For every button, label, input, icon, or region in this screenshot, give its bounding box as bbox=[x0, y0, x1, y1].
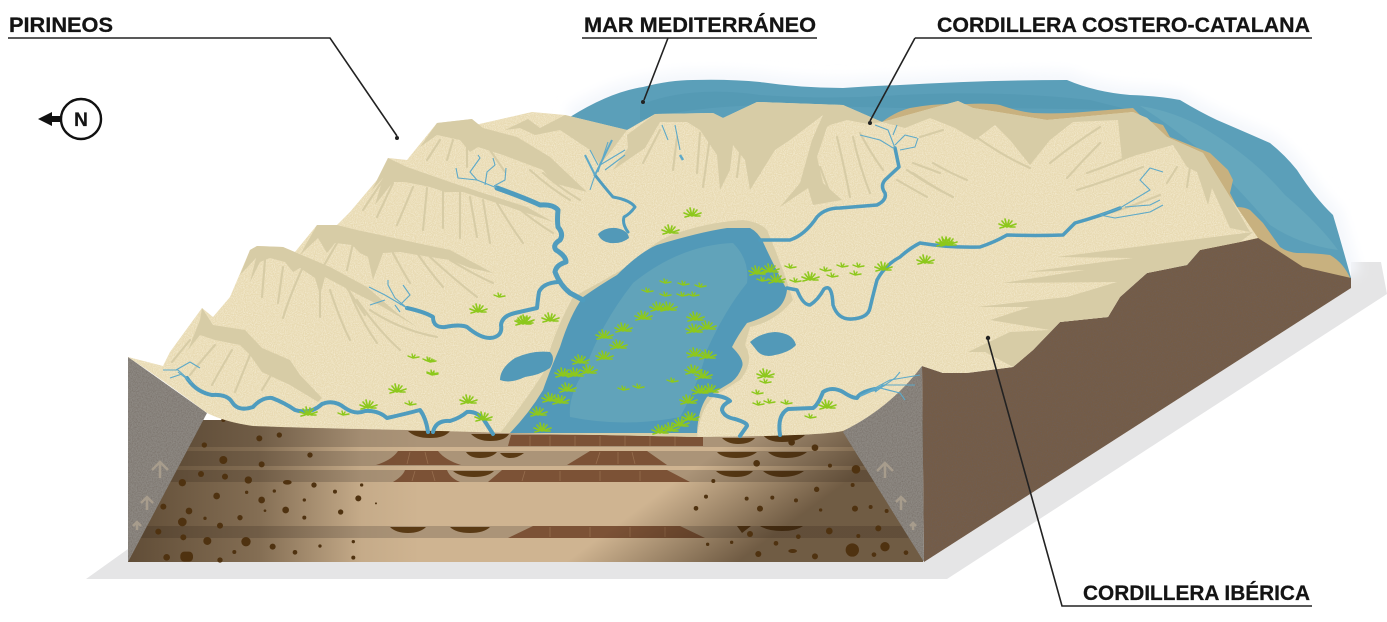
label: Cordillera Costero-Catalana bbox=[868, 14, 1312, 125]
mountain gullies bbox=[172, 120, 1190, 392]
side shading of the strata bbox=[128, 420, 923, 562]
marsh vegetation bbox=[300, 208, 1016, 434]
icon: north compass bbox=[38, 99, 101, 139]
left grey wall with faint uplift arrows bbox=[128, 357, 207, 562]
sandstone channels bbox=[376, 435, 705, 538]
label: Cordillera Ibérica bbox=[986, 336, 1312, 606]
label: Cordillera Costero-Catalana: CORDILLERA COSTERO-CATALANA bbox=[937, 14, 1310, 37]
label: Pirineos: PIRINEOS bbox=[9, 14, 113, 37]
rivers bbox=[187, 148, 1120, 436]
label: Mar Mediterráneo: MAR MEDITERRÁNEO bbox=[584, 14, 816, 37]
mediterranean sea bbox=[570, 80, 1351, 300]
right brown side: Cordillera Ibérica cross-section bbox=[922, 238, 1351, 562]
label: Pirineos bbox=[8, 14, 399, 140]
central lake bbox=[510, 228, 787, 433]
land surface: basin plain bbox=[128, 101, 1258, 437]
conglomerate lenses bbox=[390, 431, 807, 533]
pale strata bands bbox=[128, 447, 923, 562]
label: Cordillera Ibérica: CORDILLERA IBÉRICA bbox=[1083, 582, 1310, 605]
icon: north compass: N bbox=[74, 110, 88, 131]
river headwater branches bbox=[163, 125, 1163, 400]
lake shore bbox=[500, 220, 793, 437]
coastal beach bbox=[882, 104, 1351, 290]
mountain ridges: Pirineos and Costero-Catalana bbox=[188, 101, 1253, 402]
conglomerate pebbles right bbox=[694, 439, 908, 559]
ground shadow bbox=[86, 262, 1387, 579]
right grey wall with faint uplift arrows bbox=[843, 366, 924, 562]
label: Mar Mediterráneo bbox=[582, 14, 817, 104]
conglomerate pebbles left bbox=[155, 418, 377, 563]
front section: sediment strata bbox=[128, 418, 923, 563]
ponds bbox=[500, 228, 796, 381]
